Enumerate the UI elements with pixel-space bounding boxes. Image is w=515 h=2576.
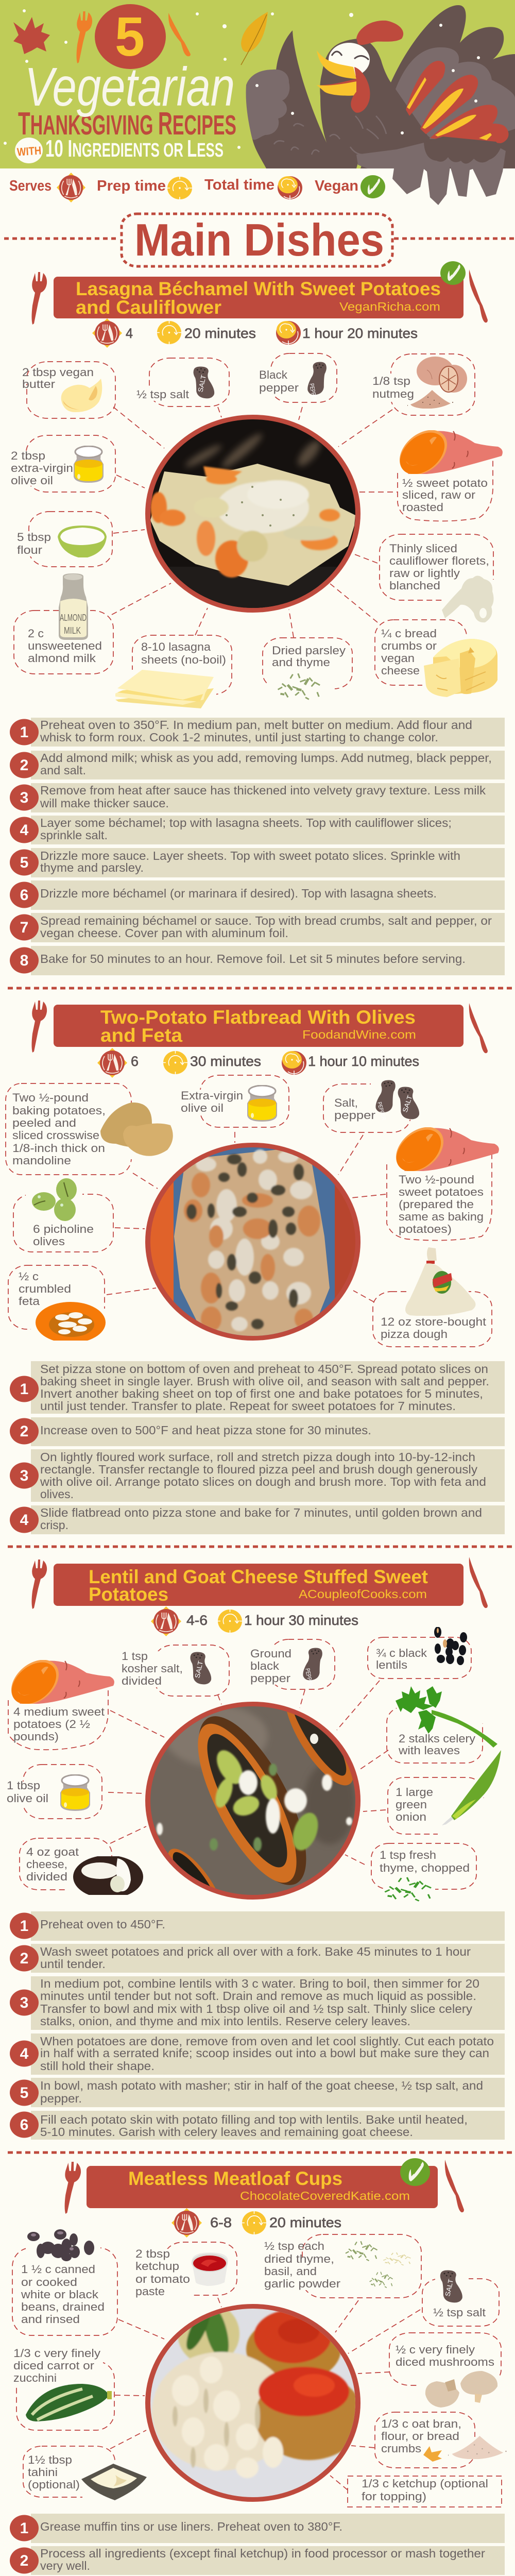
step 2: Increase oven to 500°F and heat pizza stone for 30 minutes.: [40, 1423, 371, 1437]
ingredient: beans: 1 ½ c canned: [21, 2263, 95, 2276]
step 2: 2: [20, 1950, 28, 1967]
step 3: [10, 1449, 505, 1502]
ingredient: green onion: [388, 1750, 501, 1837]
step 8: Bake for 50 minutes to an hour. Remove foil. Let sit 5 minutes before serving.: [40, 952, 466, 965]
icon: knife: [168, 13, 191, 56]
step 3: rectangle. Transfer rectangle to floured pizza peel and brush dough generously: [40, 1463, 478, 1476]
recipe banner: Lasagna Béchamel With Sweet Potatoes: [76, 278, 441, 299]
step 6: 5-10 minutes. Garish with celery leaves and remaining goat cheese.: [40, 2125, 413, 2139]
ingredient: ketchup: ketchup: [135, 2260, 179, 2273]
meta row: 30 minutes: [190, 1054, 261, 1069]
ingredient: baking potatoes: peeled and: [12, 1116, 76, 1129]
icon: serves: [57, 173, 85, 202]
ingredient: kosher salt: kosher salt,: [122, 1662, 183, 1675]
ingredient: ketchup topping: for topping): [362, 2490, 426, 2503]
meta row: 6: [131, 1054, 139, 1069]
ingredient: beans: white or black: [21, 2288, 99, 2301]
photo: stuffed sweet potato: [145, 1702, 360, 1900]
step 6: Drizzle more béchamel (or marinara if desired). Top with lasagna sheets.: [40, 887, 437, 900]
meta row: 4-6: [186, 1613, 208, 1628]
ingredient: baking potatoes: Two ½-pound: [12, 1091, 89, 1104]
ingredient: kosher salt: [121, 1645, 229, 1696]
ingredient: sweet potato: ½ sweet potato: [402, 477, 488, 489]
panel: recipe 4 meatloaf cups: [10, 2158, 507, 2576]
step 6: Fill each potato skin with potato filling and top with lentils. Bake until heated,: [40, 2113, 468, 2126]
ingredient: picholine olives: olives: [33, 1235, 65, 1248]
legend row: Total time: [204, 177, 274, 193]
step 5: Drizzle more sauce. Layer sheets. Top with sweet potato slices. Sprinkle with: [40, 849, 460, 862]
ingredient: goat cheese: 4 oz goat: [26, 1845, 79, 1858]
ingredient: celery: with leaves: [398, 1744, 460, 1757]
ingredient: almond milk: unsweetened: [28, 639, 102, 652]
ingredient: fresh thyme: [371, 1843, 476, 1902]
meta row: 6-8: [210, 2215, 232, 2230]
ingredient: mushrooms: [389, 2333, 501, 2408]
ingredient: ground black pepper: pepper: [250, 1672, 290, 1685]
ingredient: dried herbs: [264, 2234, 421, 2298]
recipe banner: VeganRicha.com: [339, 300, 440, 313]
ingredient: oat bran: [375, 2412, 507, 2468]
step 3: 3: [20, 789, 28, 806]
step 1: whisk to form roux. Cook 1-2 minutes, until just starting to change color.: [40, 731, 438, 744]
ingredient: kosher salt: divided: [122, 1674, 162, 1687]
ingredient: lasagna sheets: [115, 635, 232, 708]
meta row: [171, 2208, 341, 2238]
ingredient: carrot or zucchini: diced carrot or: [13, 2359, 94, 2372]
ingredient: olive oil: 2 tbsp: [11, 449, 45, 462]
recipe banner: Lentil and Goat Cheese Stuffed Sweet: [89, 1566, 428, 1587]
ingredient: sweet potatoes: sweet potatoes: [399, 1185, 484, 1198]
step 3: On lightly floured work surface, roll and stretch pizza dough into 10-by-12-inch: [40, 1450, 475, 1464]
ingredient: salt and pepper: Salt,: [334, 1096, 358, 1109]
step 7: [10, 913, 505, 942]
ingredient: vegan butter: 2 tbsp vegan: [22, 366, 94, 379]
recipe banner: Two-Potato Flatbread With Olives: [100, 1007, 416, 1028]
heading: Main Dishes: [4, 214, 515, 266]
panel: recipe 1 lasagna: [10, 261, 505, 975]
ingredient: olive oil: olive oil: [11, 474, 53, 487]
ingredient: dried herbs: garlic powder: [264, 2277, 340, 2290]
title: Thanksgiving Recipes: THANKSGIVING RECIPES: [18, 106, 236, 142]
panel: recipe 2 flatbread: [6, 1001, 505, 1534]
photo: lasagna: [145, 415, 362, 613]
ingredient: tahini: (optional): [28, 2478, 80, 2491]
ingredient: beans: [12, 2229, 117, 2335]
ingredient: fresh thyme: 1 tsp fresh: [380, 1849, 436, 1861]
ingredient: salt and pepper: [323, 1080, 422, 1132]
ingredient: salt: SALT: [196, 374, 208, 393]
recipe banner: and Feta: [100, 1025, 182, 1046]
ingredient: olive oil: [180, 1075, 289, 1127]
ingredient: cauliflower: [380, 534, 497, 622]
meta row: 4: [126, 326, 133, 341]
ingredient: salt: ½ tsp salt: [136, 388, 189, 401]
ingredient: cauliflower: blanched: [389, 579, 440, 592]
ingredient: flour: 5 tbsp: [17, 531, 51, 544]
ingredient: salt: ½ tsp salt: [433, 2306, 486, 2319]
step 1: Invert another baking sheet on top of first one and bake potatoes for 5 minutes,: [40, 1387, 483, 1400]
step 2: until tender.: [40, 1957, 106, 1971]
step 3: Transfer to bowl and mix with 1 tbsp olive oil and ½ tsp salt. Thinly slice celery: [40, 2002, 473, 2015]
step 3: 3: [20, 1994, 28, 2011]
step 5: [10, 2078, 505, 2107]
ingredient: black pepper: [258, 353, 337, 402]
meta row: [92, 318, 418, 348]
ingredient: bread crumbs or cheese: vegan: [381, 652, 415, 665]
connectors: [108, 1681, 388, 1865]
step 3: with olive oil. Arrange potato slices on dough and brush more. Top with feta and: [40, 1475, 486, 1488]
ingredient: feta: crumbled: [19, 1282, 71, 1295]
ingredient: baking potatoes: [6, 1083, 173, 1175]
ingredient: oat bran: flour, or bread: [381, 2430, 459, 2443]
meta row: 1 hour 20 minutes: [302, 326, 418, 341]
ingredient: tahini: tahini: [28, 2466, 58, 2479]
ingredient: pizza dough: pizza dough: [381, 1328, 448, 1341]
ingredient: black pepper: Black: [259, 368, 288, 381]
step 2: [10, 1944, 505, 1973]
step 4: 4: [20, 2045, 29, 2062]
step 2: Process all ingredients (except final ketchup) in food processor or mash together: [40, 2547, 485, 2560]
ingredient: goat cheese: [20, 1838, 143, 1899]
ingredient: baking potatoes: mandoline: [12, 1154, 71, 1167]
step 5: pepper.: [40, 2092, 82, 2105]
ingredient: feta: [8, 1265, 108, 1343]
step 6: 6: [20, 2116, 28, 2133]
ingredient: olive oil: olive oil: [181, 1101, 224, 1114]
ingredient: ketchup: paste: [135, 2285, 165, 2298]
ingredient: baking potatoes: sliced crosswise: [12, 1129, 99, 1142]
ingredient: ground black pepper: [249, 1639, 335, 1689]
ingredient: parsley and thyme: and thyme: [272, 656, 330, 669]
ingredient: vegan butter: butter: [22, 378, 55, 391]
step 2: [10, 751, 505, 779]
ingredient: sweet potatoes: [387, 1118, 499, 1241]
ingredient: ground black pepper: Ground: [250, 1647, 291, 1660]
step 3: In medium pot, combine lentils with 3 c water. Bring to boil, then simmer for 20: [40, 1977, 479, 1990]
step 5: 5: [20, 2084, 28, 2102]
icon: maple leaf: [13, 17, 50, 54]
badge: with: WITH: [16, 144, 42, 159]
ingredient: black lentils: lentils: [376, 1658, 407, 1671]
step 4: 4: [20, 822, 29, 839]
ingredient: ketchup: [135, 2242, 237, 2298]
ingredient: ground black pepper: black: [250, 1659, 280, 1672]
step 1: 1: [20, 1381, 28, 1398]
ingredient: black lentils: ¾ c black: [376, 1647, 427, 1659]
ingredient: sweet potatoes: pounds): [13, 1730, 59, 1743]
recipe banner: [32, 1557, 488, 1609]
subtitle: 10 INGREDIENTS OR LESS: [45, 135, 224, 162]
step 1: [10, 1911, 505, 1941]
ingredient: olive oil: Extra-virgin: [181, 1089, 243, 1102]
ingredient: sweet potatoes: potatoes): [399, 1223, 452, 1235]
ingredient: flour: flour: [17, 544, 42, 556]
ingredient: bread crumbs or cheese: ¼ c bread: [381, 627, 437, 640]
ingredient: ketchup topping: 1/3 c ketchup (optional: [362, 2477, 488, 2490]
ingredient: dried herbs: ½ tsp each: [264, 2240, 324, 2252]
ingredient: baking potatoes: 1/8-inch thick on: [12, 1142, 105, 1155]
ingredient: ground black pepper: PEPPER: [304, 1668, 314, 1687]
connectors: [107, 1132, 386, 1302]
step 3: olives.: [40, 1487, 74, 1501]
ingredient: sweet potatoes: [3, 1651, 114, 1750]
step 5: 5: [20, 854, 28, 871]
ingredient: olive oil: [10, 435, 115, 492]
recipe banner: Potatoes: [89, 1584, 168, 1605]
ingredient: salt and pepper: pepper: [334, 1109, 375, 1122]
step 2: and salt.: [40, 764, 86, 777]
step 1: Grease muffin tins or use liners. Preheat oven to 380°F.: [40, 2520, 342, 2533]
ingredient: feta: ½ c: [19, 1270, 39, 1283]
ingredient: oat bran: crumbs: [381, 2442, 421, 2455]
icon: total time: [278, 176, 302, 199]
ingredient: salt: SALT: [443, 2278, 455, 2297]
ingredient: lasagna sheets: sheets (no-boil): [141, 653, 226, 666]
recipe banner: ACoupleofCooks.com: [299, 1587, 427, 1601]
ingredient: salt: [422, 2270, 499, 2326]
ingredient: sweet potato: roasted: [402, 501, 443, 514]
step 1: [10, 2514, 505, 2543]
ingredient: almond milk: almond milk: [28, 652, 96, 665]
ingredient: tahini: 1½ tbsp: [28, 2453, 72, 2466]
legend row: Prep time: [97, 178, 166, 194]
meta row: 20 minutes: [269, 2215, 341, 2230]
ingredient: ketchup topping: [348, 2476, 502, 2507]
ingredient: sweet potatoes: potatoes (2 ½: [13, 1718, 90, 1731]
panel: recipe 3 stuffed sweet potatoes: [3, 1557, 505, 2140]
step 7: vegan cheese. Cover pan with aluminum foil.: [40, 926, 288, 940]
ingredient: green onion: onion: [396, 1810, 426, 1823]
ingredient: pizza dough: [373, 1247, 492, 1347]
step 4: sprinkle salt.: [40, 828, 108, 842]
photo: flatbread: [145, 1143, 360, 1341]
ingredient: cauliflower: Thinly sliced: [389, 542, 457, 555]
step 5: [10, 848, 505, 877]
ingredient: picholine olives: 6 picholine: [33, 1223, 94, 1235]
ingredient: ketchup: 2 tbsp: [135, 2247, 170, 2260]
step 4: crisp.: [40, 1518, 68, 1532]
ingredient: bread crumbs or cheese: crumbs or: [381, 639, 437, 652]
step 8: [10, 946, 505, 975]
icon: fork: [77, 11, 92, 63]
ingredient: dried herbs: dried thyme,: [264, 2252, 334, 2265]
ingredient: sweet potatoes: (prepared the: [399, 1198, 474, 1211]
step 2: Wash sweet potatoes and prick all over with a fork. Bake 45 minutes to 1 hour: [40, 1945, 471, 1958]
ingredient: almond milk: 2 c: [28, 627, 44, 640]
ingredient: goat cheese: cheese,: [26, 1858, 67, 1871]
ingredient: goat cheese: divided: [26, 1870, 67, 1883]
ingredient: sweet potatoes: same as baking: [399, 1210, 484, 1223]
connectors: [110, 2298, 420, 2490]
step 2: Add almond milk; whisk as you add, removing lumps. Add nutmeg, black pepper,: [40, 751, 492, 765]
recipe banner: FoodandWine.com: [302, 1028, 416, 1041]
step 1: Set pizza stone on bottom of oven and preheat to 450°F. Spread potato slices on: [40, 1362, 488, 1376]
icon: prep time: [167, 177, 192, 199]
ingredient: cauliflower: raw or lightly: [389, 567, 460, 580]
badge: with: [15, 138, 43, 163]
ingredient: almond milk: [14, 573, 113, 674]
ingredient: nutmeg: 1/8 tsp: [372, 375, 410, 387]
step 1: 1: [20, 724, 28, 741]
ingredient: green onion: green: [396, 1798, 427, 1811]
step 4: Layer some béchamel; top with lasagna sheets. Top with cauliflower slices;: [40, 816, 452, 829]
ingredient: parsley and thyme: Dried parsley: [272, 644, 346, 657]
meta row: 1 hour 10 minutes: [308, 1054, 419, 1069]
ingredient: almond milk: MILK: [64, 625, 81, 636]
ingredient: sweet potato: [391, 421, 503, 521]
ingredient: carrot or zucchini: zucchini: [13, 2371, 57, 2384]
step 2: very well.: [40, 2559, 90, 2572]
step 2: [10, 2546, 505, 2575]
step 1: until just tender. Transfer to plate. Repeat for sweet potatoes for 7 minutes.: [40, 1399, 456, 1413]
step 1: Preheat oven to 350°F. In medium pan, melt butter on medium. Add flour and: [40, 718, 472, 732]
icon: number circle: 5: [115, 5, 145, 67]
step 6: [10, 2111, 505, 2140]
ingredient: almond milk: ALMOND: [60, 613, 87, 623]
ingredient: kosher salt: 1 tsp: [122, 1650, 148, 1663]
ingredient: dried herbs: basil, and: [264, 2265, 317, 2278]
meta row: [97, 1048, 419, 1078]
ingredient: parsley and thyme: [263, 638, 352, 700]
photo: meatloaf cups: [145, 2301, 363, 2503]
step 7: 7: [20, 919, 28, 936]
ingredient: bread crumbs or cheese: cheese: [381, 664, 420, 677]
step 6: 6: [20, 887, 28, 904]
ingredient: olive oil: olive oil: [7, 1792, 48, 1805]
ingredient: lasagna sheets: 8-10 lasagna: [141, 640, 211, 653]
ingredient: pizza dough: 12 oz store-bought: [381, 1315, 486, 1328]
recipe banner: ChocolateCoveredKatie.com: [240, 2189, 410, 2202]
ingredient: tahini: [23, 2446, 147, 2500]
ingredient: beans: or cooked: [21, 2276, 77, 2289]
ingredient: salt: [134, 358, 229, 406]
icon: number circle: [95, 4, 166, 69]
turkey illustration: [246, 5, 515, 205]
heading: Main Dishes: Main Dishes: [134, 214, 384, 265]
step 1: [10, 1361, 505, 1414]
step 3: [10, 783, 505, 812]
ingredient: mushrooms: ½ c very finely: [396, 2343, 475, 2356]
ingredient: vegan butter: [22, 362, 115, 418]
step 8: 8: [20, 952, 28, 969]
meta row: 20 minutes: [184, 326, 256, 341]
ingredient: kosher salt: SALT: [193, 1660, 204, 1679]
header banner: [0, 0, 515, 205]
ingredient: picholine olives: [13, 1178, 113, 1252]
step 4: Slide flatbread onto pizza stone and bake for 7 minutes, until golden brown and: [40, 1506, 482, 1519]
recipe banner: [32, 261, 488, 325]
ingredient: olive oil: [6, 1765, 102, 1819]
step 4: 4: [20, 1512, 29, 1529]
ingredient: olive oil: extra-virgin: [11, 462, 73, 474]
ingredient: feta: feta: [19, 1295, 40, 1308]
step 2: 2: [20, 757, 28, 774]
step 1: Preheat oven to 450°F.: [40, 1918, 165, 1931]
step 4: [10, 2033, 505, 2075]
ingredient: baking potatoes: baking potatoes,: [12, 1104, 106, 1117]
recipe banner: [65, 2158, 464, 2214]
step 5: thyme and parsley.: [40, 861, 144, 874]
ingredient: black lentils: [368, 1626, 471, 1679]
connectors: [112, 407, 398, 637]
recipe banner: and Cauliflower: [76, 297, 221, 318]
ingredient: sweet potatoes: Two ½-pound: [399, 1173, 474, 1186]
ingredient: flour: [15, 512, 112, 567]
step 4: still hold their shape.: [40, 2059, 154, 2073]
legend row: [9, 173, 385, 202]
legend row: Serves: [9, 178, 52, 194]
step 6: [10, 880, 505, 910]
ingredient: celery: 2 stalks celery: [399, 1732, 475, 1745]
step 3: stalks, onion, and thyme and mix into lentils. Reserve celery leaves.: [40, 2014, 410, 2028]
ingredient: sweet potatoes: 4 medium sweet: [13, 1705, 105, 1718]
ingredient: salt and pepper: PEPPER: [376, 1101, 387, 1121]
ingredient: black pepper: PEPPER: [308, 383, 318, 402]
ingredient: ketchup: or tomato: [135, 2273, 190, 2285]
ingredient: cauliflower: cauliflower florets,: [389, 554, 489, 567]
step 3: 3: [20, 1467, 28, 1484]
step 4: When potatoes are done, remove from oven and let cool slightly. Cut each potato: [40, 2035, 494, 2048]
meta row: [151, 1606, 358, 1636]
ingredient: carrot or zucchini: [10, 2347, 114, 2430]
ingredient: nutmeg: nutmeg: [372, 387, 414, 400]
recipe banner: [32, 1001, 488, 1053]
ingredient: mushrooms: diced mushrooms: [396, 2355, 494, 2368]
ingredient: salt and pepper: SALT: [401, 1094, 414, 1113]
ingredient: nutmeg: [371, 354, 475, 415]
meta row: 1 hour 30 minutes: [244, 1613, 358, 1628]
ingredient: sweet potato: sliced, raw or: [402, 488, 475, 501]
legend row: Vegan: [315, 178, 358, 194]
step 7: Spread remaining béchamel or sauce. Top with bread crumbs, salt and pepper, or: [40, 914, 492, 927]
step 2: [10, 1417, 505, 1446]
step 1: 1: [20, 1918, 28, 1935]
icon: vegan: [360, 175, 385, 198]
step 4: [10, 816, 505, 844]
step 1: baking sheet in single layer. Brush with olive oil, and season with salt and pepper.: [40, 1375, 489, 1388]
ingredient: green onion: 1 large: [396, 1786, 433, 1799]
decorative snow dots: [4, 9, 480, 149]
step 3: will make thicker sauce.: [40, 796, 169, 810]
ingredient: celery: [387, 1686, 497, 1763]
step 3: minutes until tender but not soft. Drain and remove as much liquid as possible.: [40, 1989, 476, 2003]
ingredient: oat bran: 1/3 c oat bran,: [381, 2417, 461, 2430]
step 3: Remove from heat after sauce has thickened into velvety gravy texture. Less milk: [40, 784, 486, 797]
step 3: [10, 1976, 505, 2030]
step 4: in half with a serrated knife; scoop insides out into a bowl but make sure they can: [40, 2046, 489, 2060]
step 1: [10, 718, 505, 747]
ingredient: beans: beans, drained: [21, 2300, 105, 2313]
step 2: 2: [20, 1423, 28, 1440]
step 4: [10, 1505, 505, 1534]
recipe banner: Meatless Meatloaf Cups: [128, 2168, 342, 2189]
step 1: 1: [20, 2520, 28, 2537]
icon: yellow leaf: [241, 12, 268, 65]
ingredient: bread crumbs or cheese: [375, 620, 497, 697]
title: Vegetarian: Vegetarian: [25, 57, 235, 117]
ingredient: olive oil: 1 tbsp: [7, 1779, 40, 1792]
ingredient: black pepper: pepper: [259, 381, 299, 394]
ingredient: fresh thyme: thyme, chopped: [380, 1861, 470, 1874]
ingredient: carrot or zucchini: 1/3 c very finely: [13, 2347, 100, 2360]
step 5: In bowl, mash potato with masher; stir in half of the goat cheese, ½ tsp salt, and: [40, 2079, 483, 2092]
ingredient: beans: and rinsed: [21, 2313, 80, 2326]
step 2: 2: [20, 2552, 28, 2569]
